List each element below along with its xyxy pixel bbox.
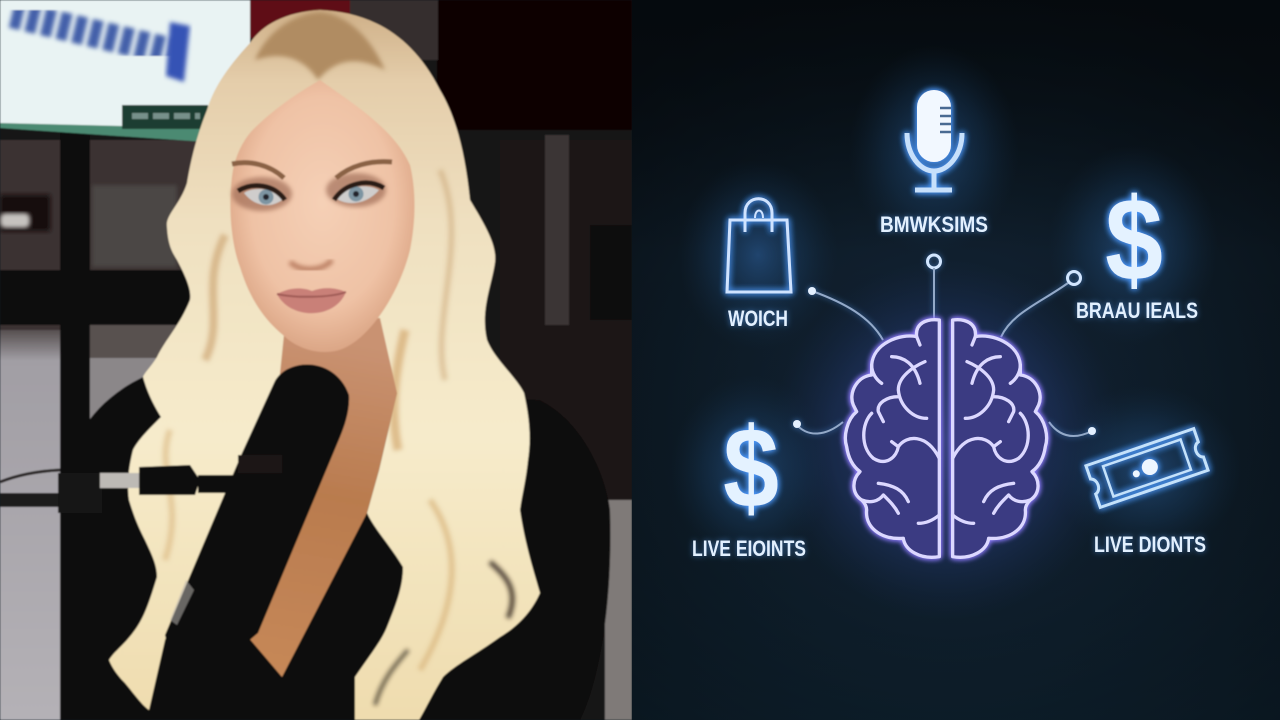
label: microphone: BMWKSIMS [880,212,988,237]
icon: ticket [1086,429,1208,507]
shelving unit [0,0,632,720]
microphone boom [0,465,258,513]
eyes [232,162,392,211]
icon: dollar upper right: $ [1105,173,1163,305]
glow halos [671,45,1242,620]
outfit [62,377,610,720]
icon: microphone [907,90,962,190]
right hemisphere [953,320,1047,557]
face [230,80,414,352]
panel: studio photo [0,0,632,720]
nose and lips [277,260,346,313]
label: shopping bag: WOICH [728,306,788,331]
icon: dollar lower left: $ [723,404,779,531]
left hemisphere [845,320,939,557]
label: dollar lower left: LIVE EIOINTS [692,536,806,561]
hair [109,10,540,720]
connector lines [793,255,1096,436]
label: dollar upper right: BRAAU IEALS [1076,298,1198,323]
red accent [248,0,350,38]
icon: brain [845,320,1047,557]
microphone [165,365,349,667]
neck and chest [248,318,397,677]
wall background [0,325,64,720]
icon: shopping bag [727,199,791,292]
panel: glowing diagram [632,0,1280,720]
hair shading [165,12,512,705]
wall screen [0,0,250,142]
label: ticket: LIVE DIONTS [1094,532,1206,557]
